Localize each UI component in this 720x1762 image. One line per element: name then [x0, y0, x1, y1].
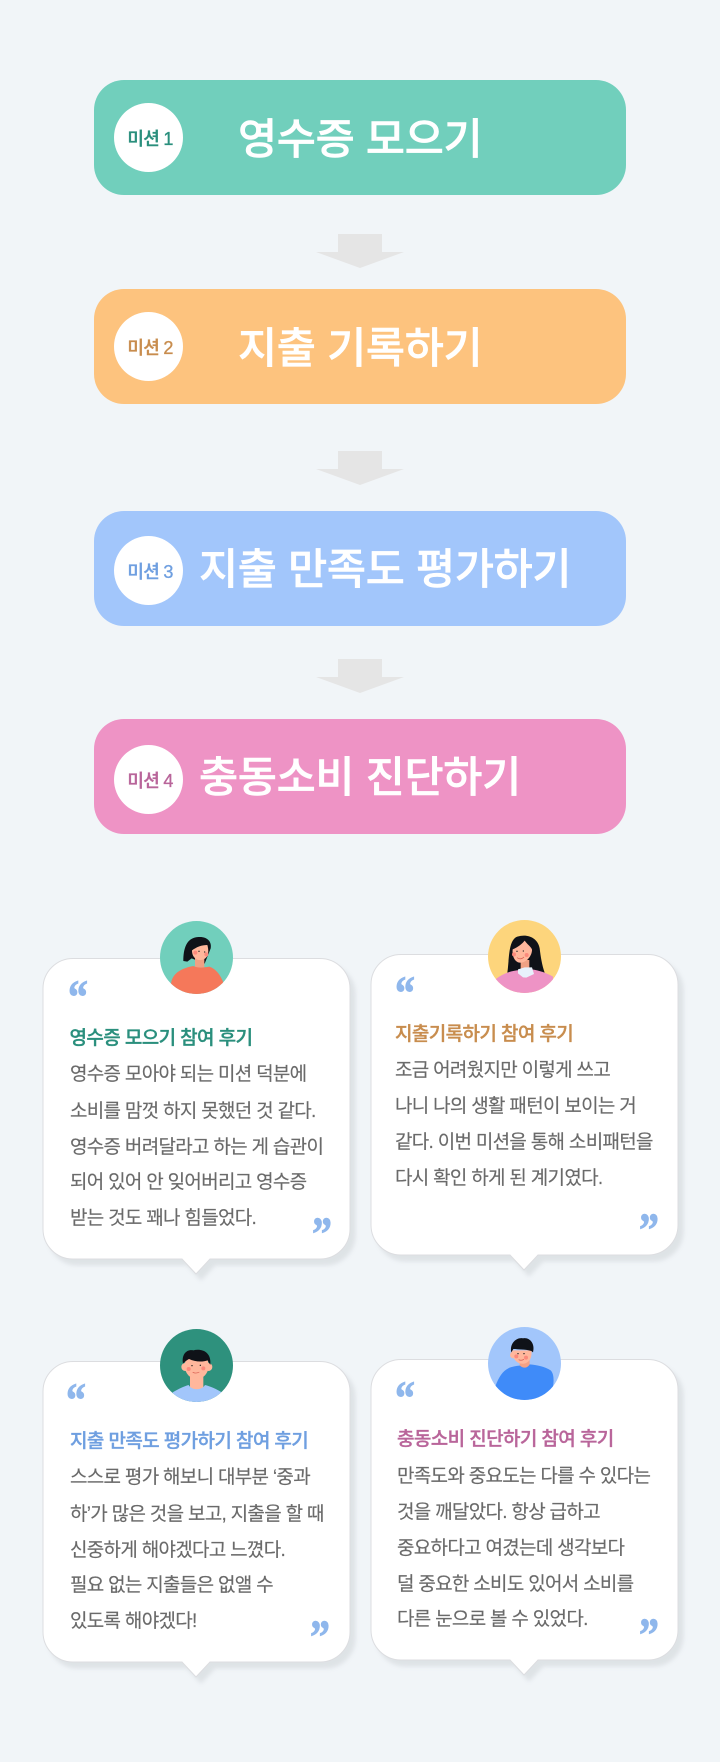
text: card 1 line 5: 받는 것도 꽤나 힘들었다.	[70, 1208, 256, 1229]
panel: review card 1: ”	[312, 1207, 332, 1261]
panel: review card 4: ”	[639, 1608, 659, 1662]
arrow: down 3	[316, 659, 404, 693]
panel: review card 3: ”	[310, 1610, 330, 1664]
icon: avatar man blue shirt	[488, 1327, 561, 1400]
badge: mission 4: 미션 4	[127, 771, 173, 791]
panel: review card 1: “	[68, 970, 88, 1024]
badge: mission 3	[114, 536, 183, 605]
badge: mission 1: 미션 1	[127, 129, 173, 149]
text: card 4 line 5: 다른 눈으로 볼 수 있었다.	[397, 1609, 588, 1630]
text: card 4 line 1: 만족도와 중요도는 다를 수 있다는	[397, 1466, 650, 1487]
panel: review card 2	[370, 920, 684, 1276]
panel: mission 2 bar	[94, 289, 626, 404]
text: card 1 line 4: 되어 있어 안 잊어버리고 영수증	[70, 1172, 306, 1193]
panel: review card 1	[42, 921, 356, 1280]
heading: mission 4 title: 충동소비 진단하기	[199, 755, 521, 802]
panel: mission 4 bar	[94, 719, 626, 834]
panel: mission 3 bar	[94, 511, 626, 626]
text: card 4 line 4: 덜 중요한 소비도 있어서 소비를	[397, 1574, 633, 1595]
text: card 4 line 2: 것을 깨달았다. 항상 급하고	[397, 1502, 600, 1523]
badge: mission 3: 미션 3	[127, 562, 173, 582]
text: card 2 line 2: 나니 나의 생활 패턴이 보이는 거	[395, 1096, 636, 1117]
text: card 2 line 1: 조금 어려웠지만 이렇게 쓰고	[395, 1060, 610, 1081]
icon: avatar man	[160, 1329, 233, 1402]
text: card 3 line 1: 스스로 평가 해보니 대부분 ‘중과	[70, 1467, 310, 1488]
text: card 4 line 3: 중요하다고 여겼는데 생각보다	[397, 1538, 624, 1559]
panel: review card 3	[42, 1329, 356, 1682]
text: card 1 line 1: 영수증 모아야 되는 미션 덕분에	[70, 1064, 306, 1085]
panel: review card 3: “	[66, 1373, 86, 1427]
panel: review card 4: “	[395, 1371, 415, 1425]
arrow: down 2	[316, 451, 404, 485]
text: card 3 line 5: 있도록 해야겠다!	[70, 1611, 197, 1632]
badge: mission 1	[114, 103, 183, 172]
panel: review card 2: ”	[639, 1203, 659, 1257]
text: card 1 line 2: 소비를 맘껏 하지 못했던 것 같다.	[70, 1101, 316, 1122]
icon: avatar woman long hair	[488, 920, 561, 993]
badge: mission 2	[114, 312, 183, 381]
text: card 2 heading: 지출기록하기 참여 후기	[395, 1024, 573, 1045]
heading: mission 2 title: 지출 기록하기	[238, 326, 482, 373]
badge: mission 4	[114, 745, 183, 814]
icon: avatar woman short hair	[160, 921, 233, 994]
text: card 2 line 4: 다시 확인 하게 된 계기였다.	[395, 1168, 602, 1189]
text: card 3 line 3: 신중하게 해야겠다고 느꼈다.	[70, 1540, 285, 1561]
arrow: down 1	[316, 234, 404, 268]
text: card 4 heading: 충동소비 진단하기 참여 후기	[397, 1429, 614, 1450]
text: card 3 line 2: 하’가 많은 것을 보고, 지출을 할 때	[70, 1504, 324, 1525]
text: card 3 line 4: 필요 없는 지출들은 없앨 수	[70, 1575, 273, 1596]
panel: review card 2: “	[395, 966, 415, 1020]
panel: review card 4	[370, 1327, 684, 1680]
text: card 3 heading: 지출 만족도 평가하기 참여 후기	[70, 1431, 308, 1452]
text: card 1 heading: 영수증 모으기 참여 후기	[70, 1028, 252, 1049]
badge: mission 2: 미션 2	[127, 338, 173, 358]
heading: mission 1 title: 영수증 모으기	[238, 117, 482, 164]
text: card 1 line 3: 영수증 버려달라고 하는 게 습관이	[70, 1137, 323, 1158]
text: card 2 line 3: 같다. 이번 미션을 통해 소비패턴을	[395, 1132, 653, 1153]
heading: mission 3 title: 지출 만족도 평가하기	[199, 547, 571, 594]
panel: mission 1 bar	[94, 80, 626, 195]
